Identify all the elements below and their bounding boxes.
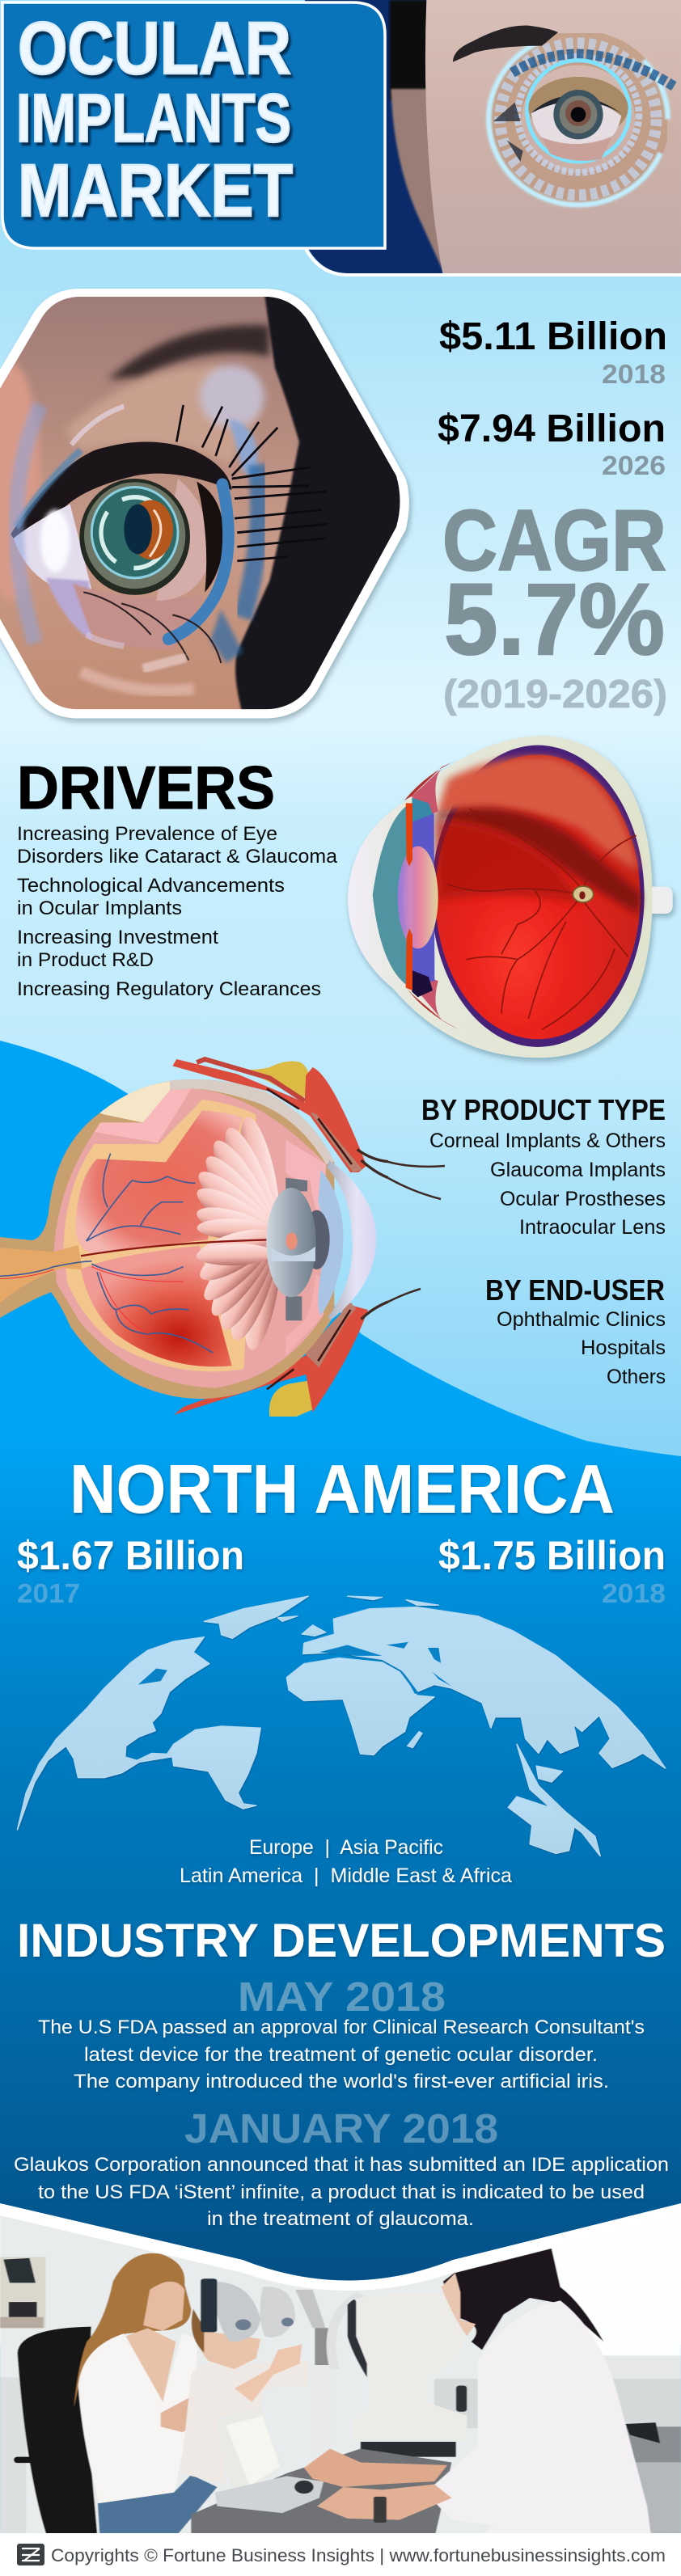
nerve core <box>0 1245 82 1303</box>
nerve lines top <box>267 1089 352 1164</box>
iris grey band <box>84 482 185 589</box>
skin base <box>0 296 400 710</box>
january 2018 text <box>14 2154 669 2230</box>
hudson bay <box>138 1668 167 1685</box>
lower chamber <box>81 1246 232 1366</box>
phoropter knob <box>201 2278 217 2332</box>
other regions list: Europe | Asia Pacific <box>249 1836 443 1859</box>
muscle top <box>172 1059 366 1172</box>
iris <box>553 90 603 139</box>
drivers list: Increasing Investment <box>17 927 218 948</box>
lens section <box>271 1247 315 1261</box>
CAGR value: 5.7% <box>444 564 665 676</box>
pupil <box>571 107 586 122</box>
suspensory pink tissue bottom <box>286 1275 324 1356</box>
right white of the eye <box>156 479 209 601</box>
lens nucleus <box>286 1232 298 1250</box>
photo: woman's eye with digital rings <box>299 0 681 277</box>
map seas <box>138 1642 451 1694</box>
sclera cut, cream <box>99 1081 170 1122</box>
optic nerve and sclera <box>0 1079 334 1399</box>
tendon brown top <box>310 1112 362 1172</box>
orange iris <box>129 500 173 560</box>
may 2018 heading: MAY 2018 <box>238 1974 446 2020</box>
blue band right <box>243 465 260 618</box>
indonesia arc <box>517 1744 600 1856</box>
mediterranean <box>319 1645 383 1656</box>
red vessels <box>0 1267 184 1334</box>
iris edge <box>79 479 190 595</box>
north america heading: NORTH AMERICA <box>70 1451 615 1528</box>
may 2018 text: latest device for the treatment of genetic ocular disorder. <box>84 2044 598 2066</box>
upper retina orange <box>437 757 639 871</box>
lower lid <box>73 584 205 649</box>
iris <box>318 1170 343 1315</box>
outer glow ring <box>489 33 668 205</box>
greenland <box>204 1596 308 1638</box>
footer strip <box>0 2533 681 2576</box>
drivers list: Increasing Prevalence of Eye <box>17 823 277 845</box>
phoropter left <box>213 2282 260 2342</box>
fat top <box>243 1061 311 1097</box>
by product type: Intraocular Lens <box>519 1216 666 1239</box>
north america 2018 value: $1.75 Billion <box>438 1533 666 1578</box>
dark chamber top <box>412 798 433 822</box>
red band bottom <box>406 928 412 990</box>
2018 label: 2018 <box>602 359 666 389</box>
2018 label: 2018 <box>602 1578 666 1608</box>
eurasia <box>303 1607 666 1768</box>
may 2018 text <box>38 2016 645 2092</box>
drivers list <box>17 823 337 1000</box>
photo frame outline <box>305 247 681 275</box>
january 2018 text: to the US FDA ‘iStent’ infinite, a product that is indicated to be used <box>38 2181 645 2203</box>
retina tan <box>63 1100 256 1371</box>
arctic islands <box>278 1596 438 1621</box>
phoropter lens left <box>235 2319 251 2330</box>
left device <box>0 2257 45 2328</box>
eyebrow <box>453 26 558 62</box>
stapler <box>625 2422 660 2443</box>
mother's face <box>143 2282 184 2331</box>
doctor's upper hand <box>304 2448 447 2487</box>
pupil shadow <box>304 1210 330 1269</box>
child's hair <box>192 2309 204 2353</box>
blue band over the brow line <box>512 54 674 87</box>
persian gulf <box>432 1672 451 1687</box>
choroid light top <box>95 1089 192 1142</box>
blue gleam over lash band <box>16 450 81 527</box>
crystalline lens <box>266 1188 316 1297</box>
blue arc <box>168 484 228 639</box>
child's head <box>193 2309 260 2369</box>
by end-user: Ophthalmic Clinics <box>497 1308 666 1331</box>
south america <box>171 1726 260 1809</box>
window sill <box>478 2359 681 2379</box>
joystick <box>456 2386 467 2412</box>
dark chamber bottom <box>412 970 433 997</box>
lid skin <box>65 365 259 465</box>
phoropter lens right <box>281 2317 294 2326</box>
iris brown <box>565 100 591 126</box>
soft arc lid <box>71 407 124 445</box>
other regions list: Latin America | Middle East & Africa <box>180 1864 512 1887</box>
ear and neck shade <box>391 89 445 275</box>
desk <box>191 2448 451 2539</box>
cyan ring <box>91 488 178 578</box>
optic stub <box>645 887 673 914</box>
dark backdrop <box>235 292 415 714</box>
fibers <box>286 1178 307 1320</box>
lavender lid light <box>200 365 264 428</box>
muscle bottom <box>174 1306 368 1415</box>
world map <box>17 1596 666 1856</box>
pupil <box>124 505 152 554</box>
white frame <box>0 289 409 718</box>
borneo <box>536 1766 562 1782</box>
january 2018 text: in the treatment of glaucoma. <box>207 2208 474 2230</box>
optic disc <box>573 886 594 902</box>
eyelid <box>528 77 628 126</box>
mother's shirt <box>78 2333 213 2503</box>
soft arc lower <box>87 635 124 646</box>
tendon brown bottom <box>310 1306 353 1361</box>
pale dashed ring <box>500 43 657 195</box>
wall <box>0 2199 681 2539</box>
chamber <box>412 803 434 984</box>
bright iris arcs <box>101 497 168 568</box>
lashes <box>357 1150 388 1320</box>
2018 value: $5.11 Billion <box>439 315 667 358</box>
suspensory pink tissue top <box>286 1140 326 1221</box>
upper lash band <box>11 441 232 538</box>
hair <box>390 0 427 99</box>
mid dashed ring <box>518 57 639 172</box>
hexagon photo with white frame <box>0 283 415 725</box>
white machine <box>348 2292 467 2440</box>
left device mechanics <box>9 2302 37 2317</box>
lavender lower patch <box>46 578 91 640</box>
eye cross-section illustration <box>348 736 673 1058</box>
child's arm <box>235 2345 302 2402</box>
title text: OCULAR <box>18 7 291 90</box>
by product type: Ocular Prostheses <box>500 1188 666 1210</box>
anatomy cross-section of the eye <box>0 1059 388 1417</box>
footer logo <box>17 2544 44 2565</box>
sclera shadow band bottom <box>407 989 459 1029</box>
left warm skin <box>0 362 40 601</box>
tan digital ring <box>504 48 653 191</box>
glint arc <box>150 510 161 557</box>
right desk <box>625 2426 681 2462</box>
title text <box>16 7 293 232</box>
dark band across retina <box>435 808 641 914</box>
sclera glare <box>40 510 70 572</box>
left cabinet <box>0 2377 26 2539</box>
footer copyright: Copyrights © Fortune Business Insights | www.fortunebusinessinsights.com <box>51 2545 666 2565</box>
doctor's lower hand <box>317 2485 451 2520</box>
drivers list: Disorders like Cataract & Glaucoma <box>17 846 337 868</box>
australia <box>508 1797 574 1853</box>
2026 label: 2026 <box>602 450 666 480</box>
fat bottom <box>269 1380 313 1417</box>
by end-user: Hospitals <box>581 1337 666 1359</box>
jeans <box>98 2475 217 2539</box>
title text: MARKET <box>18 150 293 232</box>
interior red <box>435 754 641 1039</box>
tablet screen <box>226 2416 280 2485</box>
africa <box>286 1658 434 1755</box>
heading: BY END-USER <box>485 1273 665 1307</box>
sclera cut, grey front <box>170 1079 334 1164</box>
uk <box>302 1625 326 1636</box>
photo: eye examination in clinic <box>0 2199 681 2539</box>
left monitor <box>3 2258 36 2283</box>
CAGR period: (2019-2026) <box>443 673 667 716</box>
other regions list <box>180 1836 512 1887</box>
drivers list: in Ocular Implants <box>17 897 182 919</box>
january 2018 heading: JANUARY 2018 <box>184 2105 498 2152</box>
left device base <box>0 2317 44 2328</box>
2026 value: $7.94 Billion <box>438 408 666 450</box>
blue wave section background <box>0 1041 681 2345</box>
2017 label: 2017 <box>17 1578 80 1608</box>
lens <box>398 847 438 948</box>
inner glow ring <box>527 61 629 162</box>
upper chamber <box>75 1110 243 1253</box>
by product type: Glaucoma Implants <box>490 1159 666 1181</box>
market size figures <box>438 315 667 716</box>
black sea <box>387 1642 408 1649</box>
madagascar <box>408 1732 422 1748</box>
upper lash line <box>531 95 621 113</box>
drivers heading: DRIVERS <box>17 754 275 821</box>
navy backdrop <box>299 0 445 277</box>
drivers list: in Product R&D <box>17 949 154 971</box>
bottom skin glow <box>81 672 194 690</box>
sclera <box>348 736 653 1058</box>
lower ciliary pleats <box>193 1223 288 1353</box>
phoropter arm <box>295 2290 326 2328</box>
north america <box>17 1637 209 1830</box>
cornea <box>327 1160 376 1320</box>
upper lashes <box>176 405 328 561</box>
upper ciliary pleats <box>191 1114 287 1246</box>
lavender blue side light <box>229 419 258 482</box>
may 2018 text: The U.S FDA passed an approval for Clinical Research Consultant's <box>38 2016 645 2038</box>
window <box>552 2215 681 2355</box>
red band top <box>406 803 412 867</box>
soft arcs left <box>16 405 40 644</box>
lower lid <box>542 137 612 161</box>
doctor's face <box>442 2274 476 2337</box>
industry developments heading: INDUSTRY DEVELOPMENTS <box>17 1915 666 1967</box>
by end-user: Others <box>607 1366 666 1388</box>
by product type <box>421 1093 666 1239</box>
lower blue lash glow <box>210 609 243 663</box>
mother's hand <box>161 2397 213 2432</box>
may 2018 text: The company introduced the world's first-ever artificial iris. <box>74 2071 609 2092</box>
right wall lower <box>434 2379 681 2428</box>
watch <box>374 2497 387 2523</box>
doctor's hair <box>443 2249 603 2350</box>
machine arc <box>331 2294 361 2369</box>
ciliary top <box>411 768 442 814</box>
right cabinet <box>630 2462 681 2539</box>
panel knob <box>294 2481 314 2494</box>
iris inner <box>560 95 597 133</box>
phoropter right <box>260 2287 295 2337</box>
dark pocket right of iris <box>197 482 224 592</box>
mother's chest <box>126 2328 176 2402</box>
vessels <box>447 809 637 1029</box>
brow shadow <box>108 325 269 379</box>
photo: close-up eye with digital lens <box>0 296 400 710</box>
lower lashes <box>83 592 221 663</box>
drivers list: Increasing Regulatory Clearances <box>17 978 321 1000</box>
second vessel top <box>197 1059 305 1101</box>
control panel <box>215 2476 324 2513</box>
drivers list: Technological Advancements <box>17 875 285 897</box>
blood vessels <box>0 1154 213 1353</box>
iris <box>373 806 407 985</box>
red sea <box>402 1670 419 1694</box>
face <box>425 0 681 277</box>
child's dress <box>180 2361 308 2485</box>
eyeball <box>531 103 621 144</box>
by product type: Corneal Implants & Others <box>429 1130 666 1152</box>
sclera <box>14 505 91 589</box>
sclera shadow band top <box>404 758 459 800</box>
corner dark lashes left <box>493 103 523 162</box>
red mid band <box>434 819 582 903</box>
choroid pink <box>54 1089 326 1388</box>
vitreous split line <box>81 1239 269 1256</box>
mother's hair <box>74 2253 191 2408</box>
chair <box>17 2327 98 2539</box>
column <box>315 2328 334 2365</box>
title box <box>2 2 385 248</box>
retina ring <box>431 745 645 1047</box>
column base <box>311 2365 334 2453</box>
eyelash tails <box>388 1162 445 1302</box>
tablet console <box>215 2408 282 2494</box>
doctor's coat <box>425 2300 652 2539</box>
nerve lines bottom <box>267 1310 350 1389</box>
ciliary bottom <box>411 978 442 1020</box>
chair arm <box>14 2457 49 2463</box>
optic disc pupil <box>579 891 586 899</box>
north america 2017 value: $1.67 Billion <box>17 1533 244 1578</box>
bottom skin glow two <box>143 657 186 669</box>
title text: IMPLANTS <box>16 80 291 156</box>
white wave divider <box>0 2203 681 2345</box>
january 2018 text: Glaukos Corporation announced that it has submitted an IDE application <box>14 2154 669 2176</box>
caspian <box>428 1648 441 1663</box>
machine dark stripe <box>348 2299 367 2377</box>
by end-user <box>485 1273 666 1388</box>
machine black base <box>361 2442 456 2457</box>
